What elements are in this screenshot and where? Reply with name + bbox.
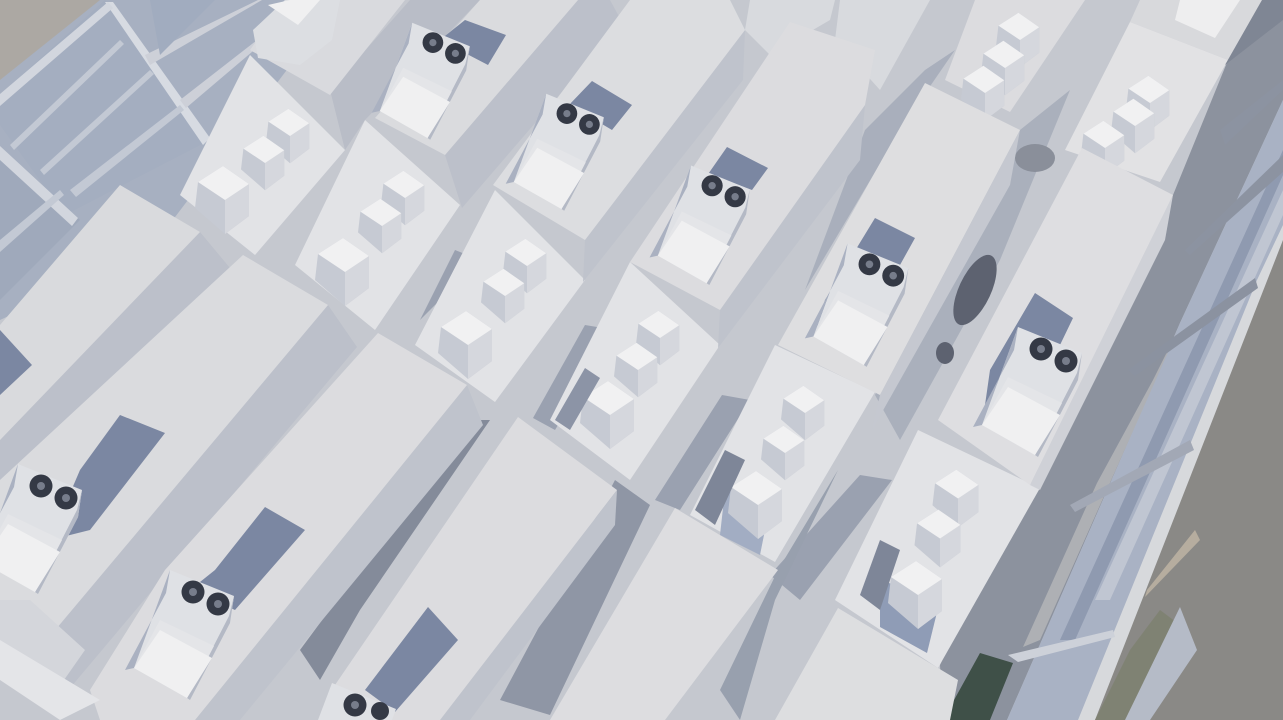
- solar panels top left: [0, 0, 340, 320]
- decks of upper row: [180, 55, 1040, 668]
- ground shadows: [300, 50, 1070, 720]
- right rack, dirt and shadowed ground: [940, 0, 1283, 720]
- upper row containers: [250, 0, 1173, 490]
- fan units upper row: [253, 0, 1082, 457]
- left row containers: [0, 185, 958, 720]
- fan units lower row: [0, 415, 458, 720]
- cooling units on decks: [195, 109, 978, 653]
- top-right containers: [745, 0, 1283, 182]
